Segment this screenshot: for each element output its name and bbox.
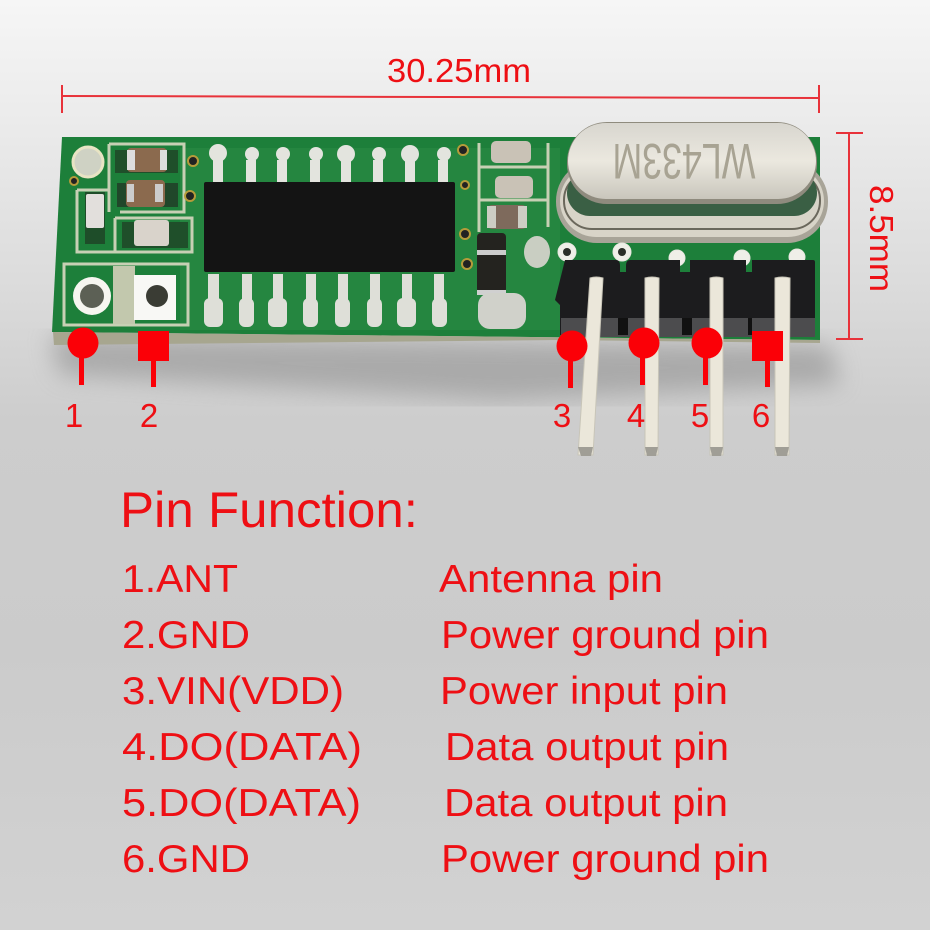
pin numbers: 5	[691, 397, 709, 434]
marker 2	[138, 331, 169, 387]
row 4: Data output pin	[445, 726, 729, 769]
IC bottom pins	[204, 274, 447, 327]
label: 8.5mm: 8.5mm	[863, 185, 900, 292]
pin vias above header	[558, 243, 805, 266]
dimension: width	[62, 85, 819, 113]
pin numbers: 2	[140, 397, 158, 434]
via holes	[563, 248, 626, 256]
heading: Pin Function: Pin Function:	[120, 482, 418, 538]
marker 6	[752, 331, 783, 387]
pin header	[555, 260, 815, 337]
pin numbers: 1	[65, 397, 83, 434]
pin tips	[578, 447, 789, 456]
row 6: 6.GND	[122, 838, 250, 881]
marker 5	[692, 328, 722, 385]
vias	[70, 145, 472, 269]
row 6: Power ground pin	[441, 838, 769, 881]
crystal can WL433M: WL433M	[612, 133, 756, 189]
label: 30.25mm: 30.25mm	[387, 52, 531, 89]
row 5	[122, 782, 728, 825]
SMD components left	[85, 148, 188, 248]
row 1: 1.ANT	[122, 558, 238, 601]
pin numbers: 6	[752, 397, 770, 434]
dimension: height	[836, 133, 863, 339]
row 3: Power input pin	[440, 670, 728, 713]
row 2	[122, 614, 769, 657]
board shadow	[50, 335, 840, 400]
row 1: Antenna pin	[439, 558, 663, 601]
row 4	[122, 726, 729, 769]
marker 1	[68, 328, 98, 385]
marker 3	[556, 330, 588, 388]
row 2: Power ground pin	[441, 614, 769, 657]
green circuit board	[52, 137, 820, 345]
pin numbers	[65, 397, 770, 434]
row 5: 5.DO(DATA)	[122, 782, 361, 825]
row 3: 3.VIN(VDD)	[122, 670, 344, 713]
row 5: Data output pin	[444, 782, 728, 825]
silkscreen outlines	[77, 144, 192, 252]
SMD components right	[477, 141, 550, 329]
IC top pins	[209, 144, 451, 182]
row 3	[122, 670, 728, 713]
row 2: 2.GND	[122, 614, 250, 657]
marker 4	[628, 328, 660, 385]
pin numbers: 3	[553, 397, 571, 434]
row 4: 4.DO(DATA)	[122, 726, 362, 769]
crystal can WL433M	[556, 122, 828, 243]
header metal pins	[578, 277, 790, 455]
row 1	[122, 558, 663, 601]
IC chip	[204, 182, 455, 272]
pin numbers: 4	[627, 397, 645, 434]
row 6	[122, 838, 769, 881]
mounting pads	[64, 147, 188, 325]
